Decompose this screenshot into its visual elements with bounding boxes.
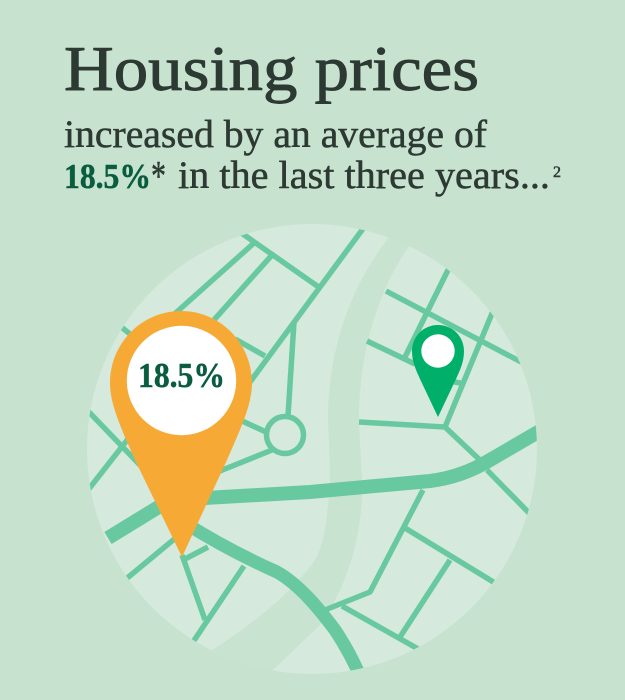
subtitle text: 2 (553, 164, 561, 181)
map background circle (87, 224, 537, 674)
icon: orange location pin (110, 311, 252, 557)
highlighted figure: 18.5% (64, 157, 151, 196)
map (87, 224, 545, 700)
roundabout (266, 416, 304, 454)
title: Housing prices (64, 33, 479, 104)
subtitle text: in the last three years... (178, 154, 550, 197)
icon: green location pin (412, 325, 464, 417)
pin percentage label: 18.5% (138, 356, 225, 395)
subtitle text (64, 113, 561, 200)
subtitle text: * (151, 154, 166, 200)
subtitle text: increased by an average of (64, 113, 487, 156)
thin streets (88, 226, 530, 650)
river (212, 238, 409, 670)
map streets and river (88, 226, 545, 700)
thick main roads (108, 428, 545, 680)
